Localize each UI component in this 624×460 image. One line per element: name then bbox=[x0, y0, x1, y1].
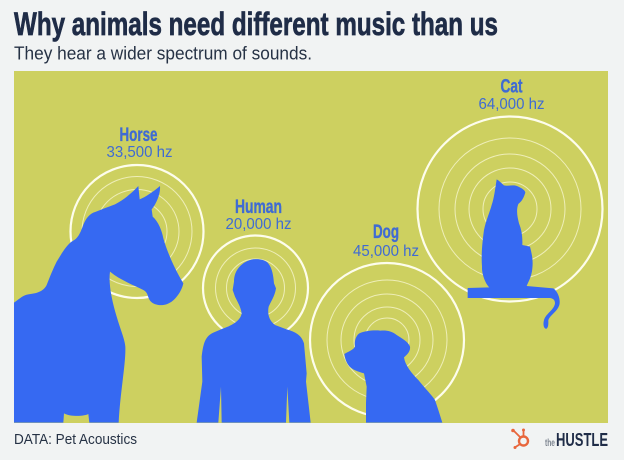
dog silhouette bbox=[344, 330, 442, 423]
dog sound rings bbox=[310, 263, 464, 417]
cat label: Cat bbox=[500, 76, 523, 98]
dog frequency: 45,000 hz bbox=[353, 243, 419, 260]
source note: DATA: Pet Acoustics bbox=[14, 431, 137, 448]
dog label: Dog bbox=[373, 222, 399, 243]
icon: hubspot sprocket bbox=[511, 428, 528, 449]
logo word: the: the bbox=[545, 438, 555, 449]
panel: horse bbox=[14, 125, 203, 423]
horse silhouette bbox=[14, 186, 183, 423]
logo: the Hustle bbox=[545, 430, 608, 450]
human silhouette bbox=[197, 259, 311, 423]
human frequency: 20,000 hz bbox=[226, 216, 292, 233]
panel: cat bbox=[418, 76, 602, 329]
subtitle: They hear a wider spectrum of sounds. bbox=[14, 44, 312, 64]
human sound rings bbox=[203, 236, 308, 340]
horse label: Horse bbox=[120, 125, 158, 146]
cat silhouette on shelf bbox=[468, 179, 560, 329]
panel: chart background bbox=[14, 71, 608, 423]
panel: dog bbox=[310, 222, 464, 423]
horse frequency: 33,500 hz bbox=[106, 144, 172, 161]
human label: Human bbox=[235, 197, 282, 218]
horse sound rings bbox=[70, 165, 204, 298]
cat sound rings bbox=[418, 116, 602, 302]
cat frequency: 64,000 hz bbox=[478, 96, 544, 113]
panel: human bbox=[197, 197, 311, 423]
